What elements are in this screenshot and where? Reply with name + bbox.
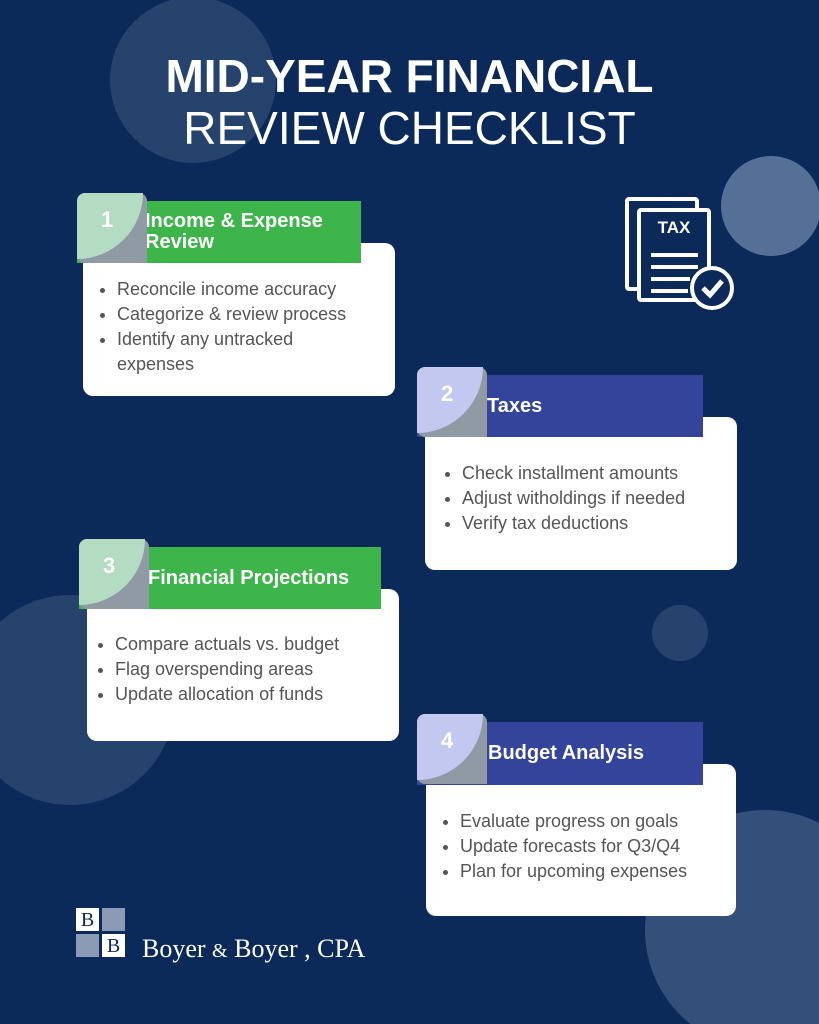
title: MID-YEAR FINANCIAL <box>165 50 654 102</box>
text: 1 <box>101 207 113 232</box>
text: Flag overspending areas <box>115 659 313 679</box>
logo: B <box>107 935 120 957</box>
text: Budget Analysis <box>488 742 644 764</box>
title <box>165 50 654 154</box>
icon: tax document <box>625 197 734 310</box>
text: Verify tax deductions <box>462 513 628 533</box>
icon: tax document: TAX <box>658 218 691 237</box>
text: Financial Projections <box>148 566 349 588</box>
text: 4 <box>441 728 453 753</box>
text: Update allocation of funds <box>115 684 323 704</box>
text: 2 <box>441 381 453 406</box>
background circle left <box>0 595 175 805</box>
background circle bottom right <box>645 810 819 1024</box>
background circle top <box>110 0 276 163</box>
title: REVIEW CHECKLIST <box>183 102 636 154</box>
background circle right <box>721 156 819 256</box>
text: Identify any untracked expenses <box>117 329 293 374</box>
text: Income & Expense <box>145 210 323 232</box>
text: Update forecasts for Q3/Q4 <box>460 836 680 856</box>
panel: financial projections <box>79 539 399 741</box>
text: Review <box>145 231 214 253</box>
background circle small <box>652 605 708 661</box>
text: Adjust witholdings if needed <box>462 488 685 508</box>
panel: income & expense review <box>77 193 395 396</box>
logo <box>76 908 366 963</box>
text: Plan for upcoming expenses <box>460 861 687 881</box>
logo: Boyer & Boyer , CPA <box>142 934 365 963</box>
panel: budget analysis <box>417 714 736 916</box>
text: Evaluate progress on goals <box>460 811 678 831</box>
text: Categorize & review process <box>117 304 346 324</box>
text: Compare actuals vs. budget <box>115 634 339 654</box>
logo: B <box>81 909 94 931</box>
panel: taxes <box>417 367 737 570</box>
text: Reconcile income accuracy <box>117 279 336 299</box>
text: Taxes <box>487 394 542 416</box>
text: Check installment amounts <box>462 463 678 483</box>
text: 3 <box>103 553 115 578</box>
